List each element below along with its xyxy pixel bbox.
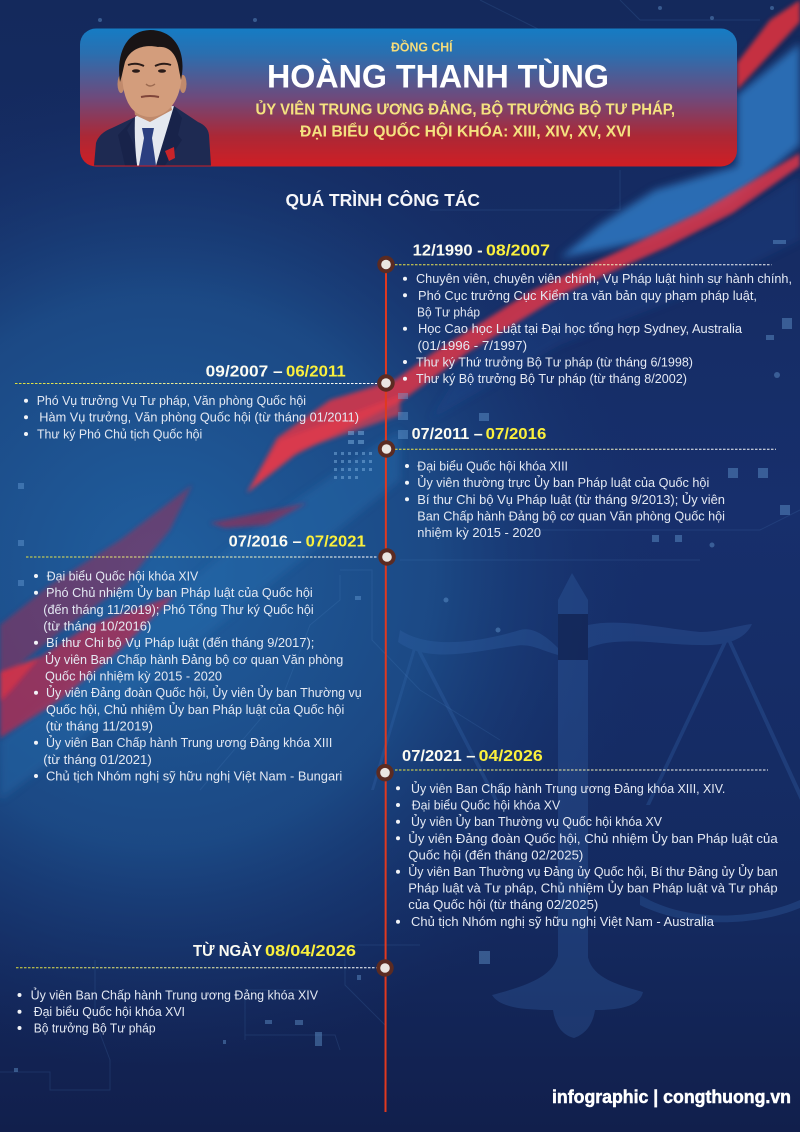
duties: Chủ tịch Nhóm nghị sỹ hữu nghị Việt Nam - Australia xyxy=(411,914,715,929)
duties: (01/1996 - 7/1997) xyxy=(418,338,527,353)
duties: Thư ký Bộ trưởng Bộ Tư pháp (từ tháng 8/2002) xyxy=(416,371,687,386)
blue ribbon xyxy=(0,43,800,800)
period heading xyxy=(413,242,550,260)
duties: Ủy viên Ban Chấp hành Trung ương Đảng khóa XIV xyxy=(31,988,318,1002)
duties: (đến tháng 11/2019); Phó Tổng Thư ký Quốc hội xyxy=(43,602,314,617)
section heading: QUÁ TRÌNH CÔNG TÁC xyxy=(286,189,480,210)
entry: 07/2016 - 07/2021 xyxy=(26,534,378,784)
duties: Ban Chấp hành Đảng bộ cơ quan Văn phòng Quốc hội xyxy=(417,508,725,524)
duties: Ủy viên Ban Chấp hành Trung ương Đảng khóa XIII xyxy=(46,735,332,750)
duties: Hàm Vụ trưởng, Văn phòng Quốc hội (từ tháng 01/2011) xyxy=(39,410,359,425)
period heading: 09/2007 – xyxy=(206,364,283,381)
duties: Đại biểu Quốc hội khóa XIV xyxy=(47,568,199,584)
duties: Ủy viên Ban Chấp hành Đảng bộ cơ quan Văn phòng xyxy=(45,652,343,667)
duties: Bộ Tư pháp xyxy=(417,304,480,320)
timeline axis xyxy=(384,264,387,1112)
period heading: 07/2011 – xyxy=(412,426,483,443)
duties: Quốc hội, Chủ nhiệm Ủy ban Pháp luật của Quốc hội xyxy=(46,702,344,717)
period heading: 04/2026 xyxy=(479,748,543,765)
period heading: 12/1990 - xyxy=(413,242,483,260)
duties: Học Cao học Luật tại Đại học tổng hợp Sydney, Australia xyxy=(418,321,743,336)
duties: Bí thư Chi bộ Vụ Pháp luật (từ tháng 9/2013); Ủy viên xyxy=(417,492,725,507)
duties: Phó Chủ nhiệm Ủy ban Pháp luật của Quốc hội xyxy=(46,585,313,600)
greeting: ĐỒNG CHÍ xyxy=(391,40,453,54)
timeline nodes xyxy=(376,256,396,977)
duties xyxy=(34,568,362,784)
period heading: 07/2021 xyxy=(306,534,366,551)
period heading: TỪ NGÀY xyxy=(193,941,263,960)
duties: Ủy viên thường trực Ủy ban Pháp luật của Quốc hội xyxy=(417,475,709,490)
entry: 07/2011 - 07/2016 xyxy=(395,426,776,540)
name: HOÀNG THANH TÙNG xyxy=(267,58,609,94)
period heading xyxy=(412,426,547,443)
period heading: 08/2007 xyxy=(486,242,550,260)
portrait xyxy=(94,30,211,166)
titles: ỦY VIÊN TRUNG ƯƠNG ĐẢNG, BỘ TRƯỞNG BỘ TƯ PHÁP, xyxy=(256,100,675,118)
duties: Ủy viên Ủy ban Thường vụ Quốc hội khóa XV xyxy=(411,814,662,829)
duties: Quốc hội (đến tháng 02/2025) xyxy=(408,848,583,862)
period heading: 08/04/2026 xyxy=(265,943,356,960)
duties: nhiệm kỳ 2015 - 2020 xyxy=(417,525,541,540)
period heading: 07/2021 – xyxy=(402,748,476,765)
entry: 07/2021 - 04/2026 xyxy=(395,748,778,929)
footer credit: infographic | congthuong.vn xyxy=(552,1087,791,1107)
duties: Bí thư Chi bộ Vụ Pháp luật (đến tháng 9/2017); xyxy=(46,635,314,650)
entry: from 08/04/2026 xyxy=(16,941,377,1036)
duties: Ủy viên Đảng đoàn Quốc hội, Ủy viên Ủy ban Thường vụ xyxy=(46,685,362,700)
scales of justice watermark xyxy=(371,573,800,1038)
red ribbons xyxy=(0,0,800,738)
duties: Phó Cục trưởng Cục Kiểm tra văn bản quy phạm pháp luật, xyxy=(418,288,757,303)
duties: Đại biểu Quốc hội khóa XIII xyxy=(417,458,568,474)
duties: Thư ký Thứ trưởng Bộ Tư pháp (từ tháng 6/1998) xyxy=(416,354,693,370)
duties: Ủy viên Ban Thường vụ Đảng ủy Quốc hội, Bí thư Đảng ủy Ủy ban xyxy=(408,864,778,879)
entry: 12/1990 - 08/2007 xyxy=(395,242,792,386)
duties: Ủy viên Đảng đoàn Quốc hội, Chủ nhiệm Ủy ban Pháp luật của xyxy=(408,831,778,846)
duties: (từ tháng 11/2019) xyxy=(46,718,153,734)
period heading: 07/2016 – xyxy=(229,534,302,551)
duties: Quốc hội nhiệm kỳ 2015 - 2020 xyxy=(45,668,222,684)
duties xyxy=(24,393,359,441)
duties: của Quốc hội (từ tháng 02/2025) xyxy=(408,897,598,912)
titles xyxy=(256,100,675,140)
dot grid xyxy=(334,431,372,479)
duties xyxy=(403,271,792,386)
duties: Bộ trưởng Bộ Tư pháp xyxy=(34,1020,156,1036)
duties: (từ tháng 10/2016) xyxy=(43,618,151,634)
period heading xyxy=(206,364,346,381)
duties xyxy=(18,988,318,1036)
titles: ĐẠI BIỂU QUỐC HỘI KHÓA: XIII, XIV, XV, XVI xyxy=(300,120,631,140)
header banner xyxy=(80,28,737,166)
duties: Chuyên viên, chuyên viên chính, Vụ Pháp luật hình sự hành chính, xyxy=(416,271,792,286)
duties: Đại biểu Quốc hội khóa XV xyxy=(412,798,561,812)
period heading: 07/2016 xyxy=(486,426,547,443)
duties xyxy=(396,781,778,929)
duties: Đại biểu Quốc hội khóa XVI xyxy=(34,1004,185,1019)
duties: Phó Vụ trưởng Vụ Tư pháp, Văn phòng Quốc hội xyxy=(37,393,306,408)
period heading xyxy=(229,534,366,551)
duties: Ủy viên Ban Chấp hành Trung ương Đảng khóa XIII, XIV. xyxy=(411,781,725,796)
duties xyxy=(405,458,725,540)
period heading xyxy=(193,941,356,960)
entry: 09/2007 - 06/2011 xyxy=(15,364,377,441)
period heading: 06/2011 xyxy=(286,364,346,381)
period heading xyxy=(402,748,543,765)
duties: (từ tháng 01/2021) xyxy=(43,752,152,767)
duties: Thư ký Phó Chủ tịch Quốc hội xyxy=(37,426,202,441)
duties: Chủ tịch Nhóm nghị sỹ hữu nghị Việt Nam - Bungari xyxy=(46,768,342,784)
duties: Pháp luật và Tư pháp, Chủ nhiệm Ủy ban Pháp luật và Tư pháp xyxy=(408,880,778,896)
